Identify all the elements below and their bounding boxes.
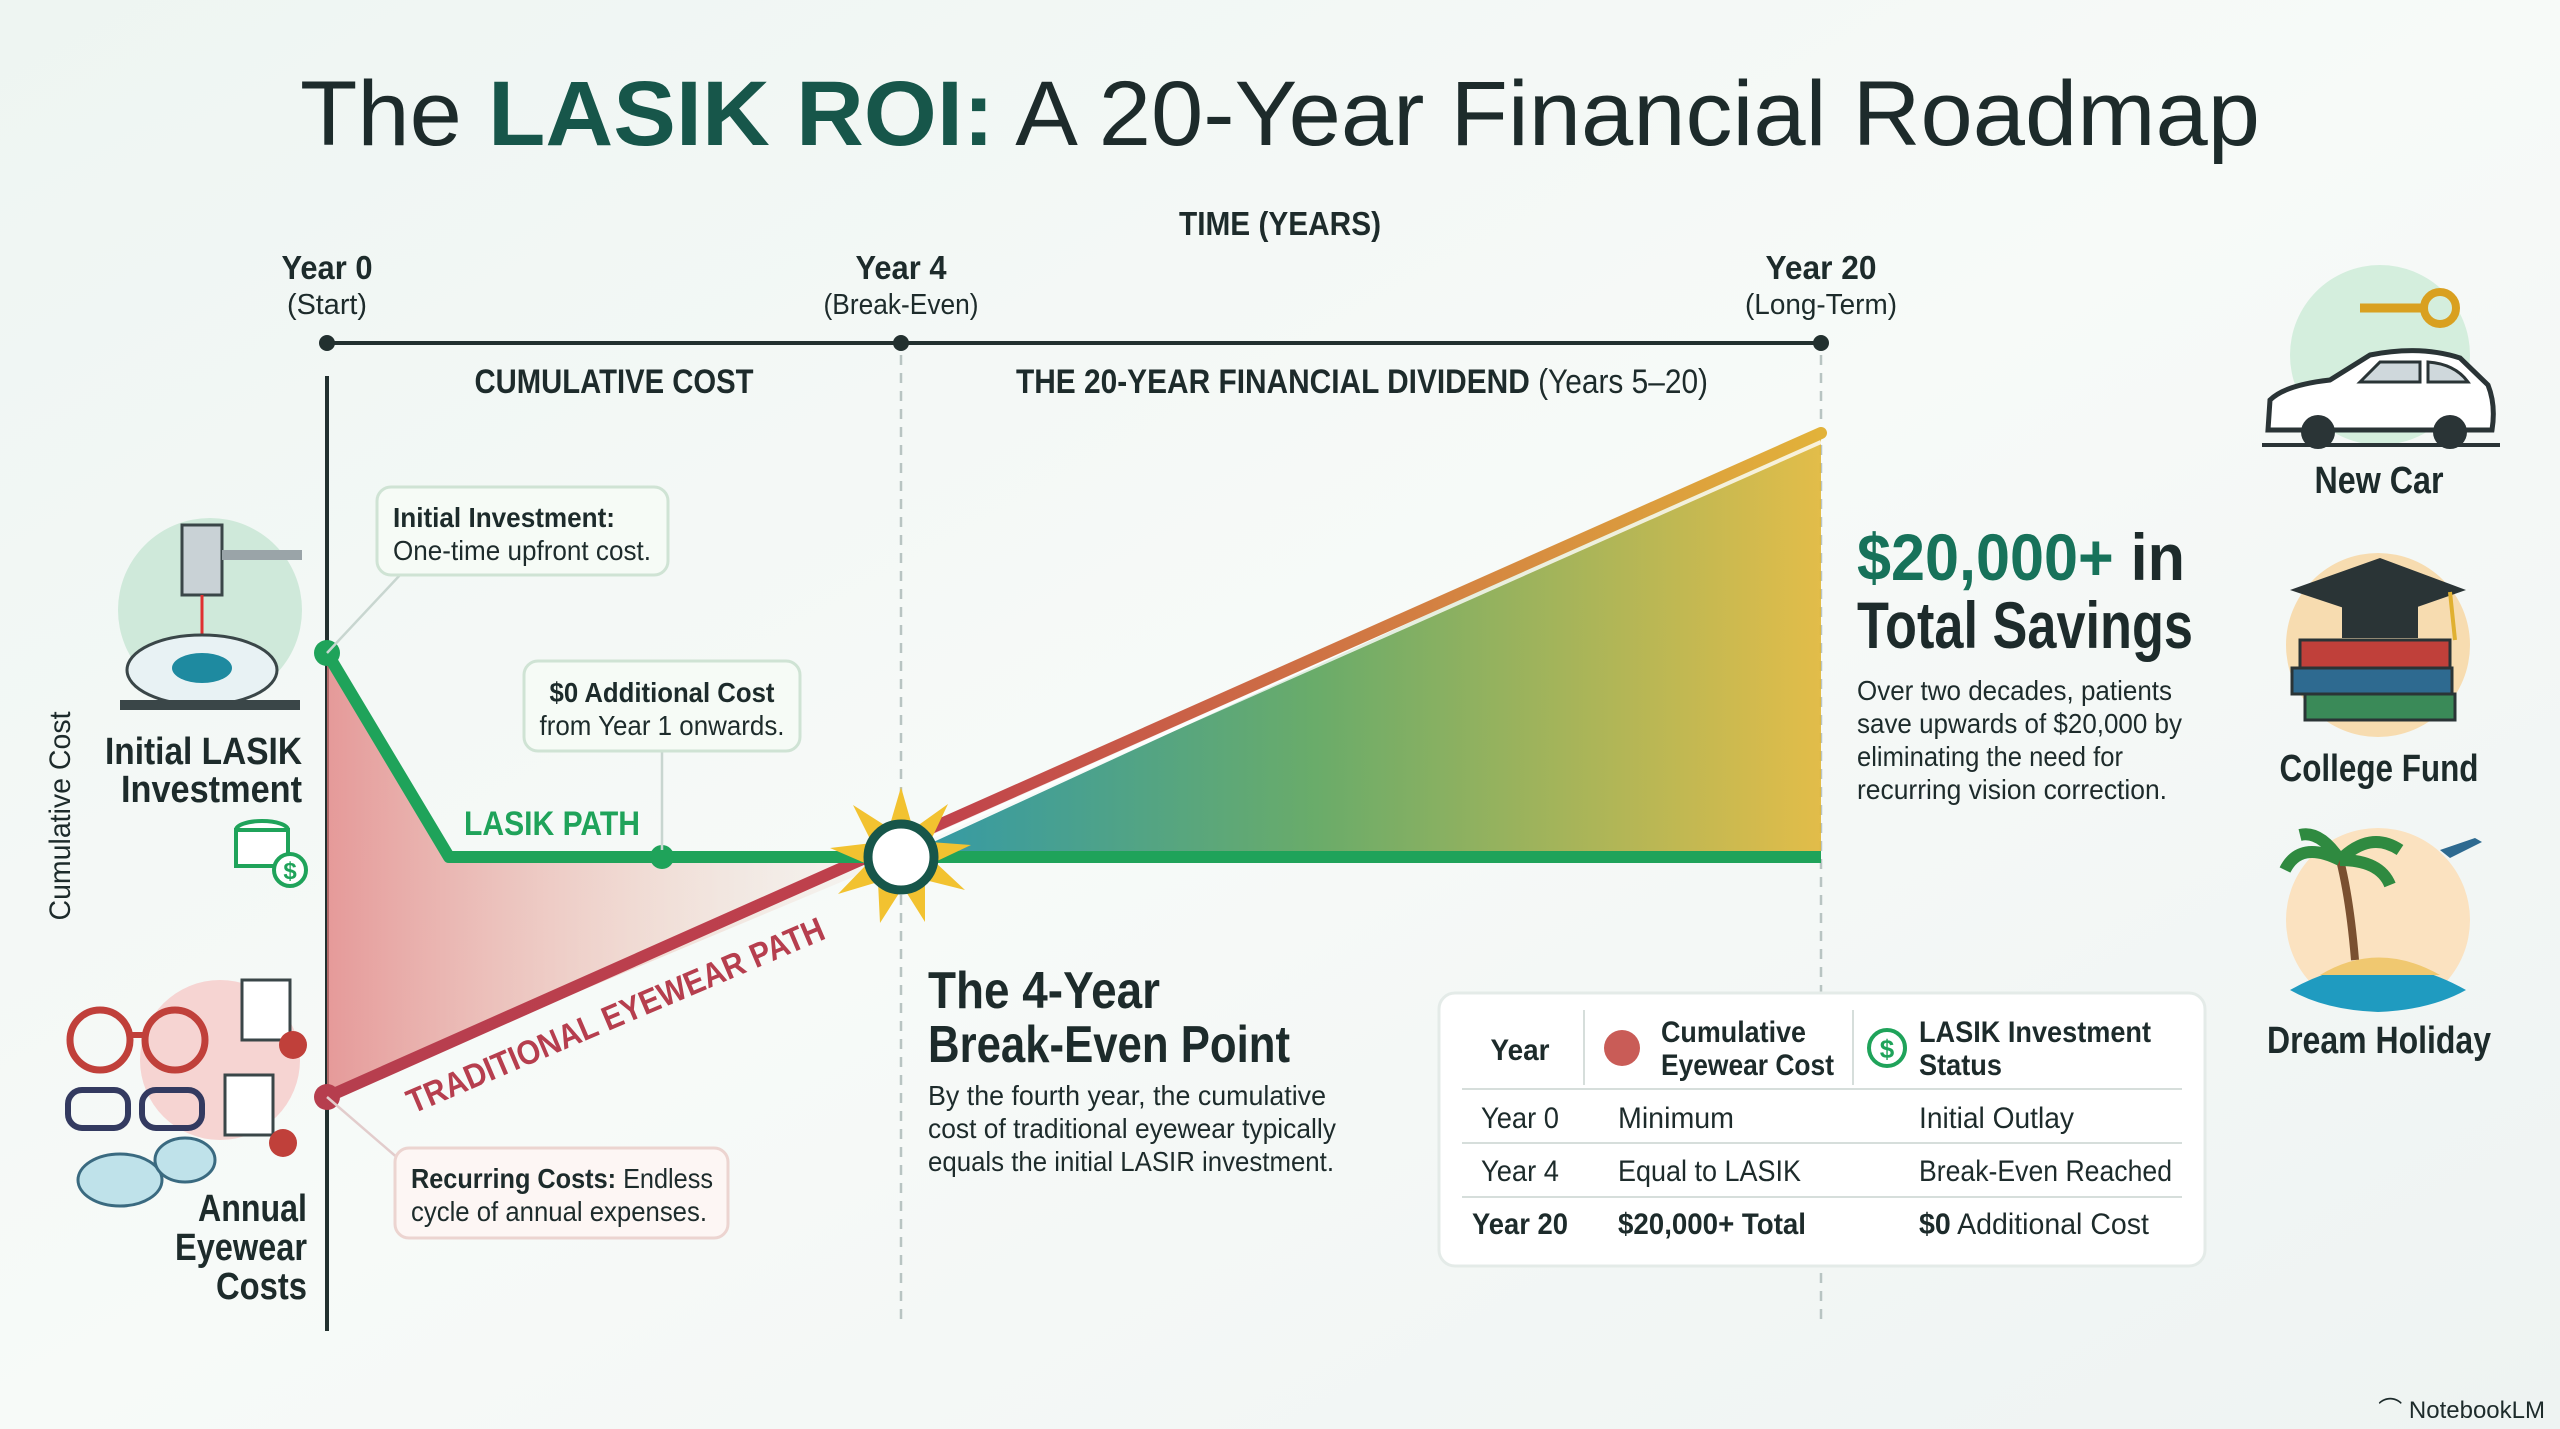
text: total savings: Total Savings (1857, 588, 2193, 662)
label: annual eyewear costs: Eyewear (175, 1227, 307, 1269)
label: annual eyewear costs (175, 1188, 307, 1308)
text: total savings (1857, 520, 2193, 805)
table: $0 Additional Cost (1919, 1208, 2150, 1241)
icon: coins (236, 821, 306, 886)
label: initial lasik investment: Investment (121, 769, 302, 811)
label: annual eyewear costs: Annual (198, 1188, 307, 1230)
lasik path line (314, 640, 1821, 1110)
table: Status (1919, 1049, 2002, 1082)
text: total savings: Over two decades, patients (1857, 675, 2172, 706)
year labels: (Long-Term) (1745, 289, 1897, 321)
icon: laser eye (118, 518, 302, 710)
text: break-even point (928, 962, 1336, 1177)
callout: initial investment (327, 487, 668, 653)
text: break-even point: equals the initial LASIR investment. (928, 1146, 1334, 1177)
year labels: (Break-Even) (824, 289, 978, 321)
table: Equal to LASIK (1618, 1155, 1801, 1188)
table: Year 0 (1481, 1102, 1559, 1135)
table: Initial Outlay (1919, 1102, 2074, 1135)
table: Break-Even Reached (1919, 1155, 2172, 1188)
axis label: time: TIME (YEARS) (1179, 205, 1381, 242)
text: total savings: recurring vision correction. (1857, 774, 2167, 805)
axis label: cumulative cost: Cumulative Cost (44, 711, 77, 920)
label: college fund: College Fund (2280, 748, 2478, 790)
year labels: Year 20 (1766, 249, 1876, 286)
icon: coins: $ (283, 858, 297, 885)
table: Year 20 (1472, 1208, 1568, 1241)
table: Eyewear Cost (1661, 1049, 1834, 1082)
text: total savings: $20,000+ in (1857, 520, 2185, 594)
red area: early cost zone (327, 653, 901, 1097)
text: break-even point: By the fourth year, the cumulative (928, 1080, 1326, 1111)
table: Year 4 (1481, 1155, 1559, 1188)
table: Minimum (1618, 1102, 1734, 1135)
label: initial lasik investment (105, 731, 302, 811)
label: lasik path: LASIK PATH (464, 805, 640, 843)
table (1439, 993, 2205, 1266)
year labels: Year 0 (282, 249, 372, 286)
icon: new car (2262, 265, 2500, 449)
callout: initial investment: One-time upfront cost. (393, 535, 651, 566)
callout: initial investment: Initial Investment: (393, 502, 615, 533)
label: annual eyewear costs: Costs (216, 1266, 307, 1308)
icon: dream holiday (2285, 828, 2482, 1012)
label: initial lasik investment: Initial LASIK (105, 731, 302, 773)
label: traditional eyewear path: TRADITIONAL EYEWEAR PATH (401, 910, 830, 1121)
time axis (319, 335, 1829, 351)
table: $ (1880, 1034, 1895, 1064)
table: Year (1490, 1034, 1550, 1067)
callout: recurring costs: Recurring Costs: Endless (411, 1163, 713, 1194)
table: $20,000+ Total (1618, 1208, 1806, 1241)
savings area (901, 433, 1821, 857)
text: break-even point: The 4-Year (928, 962, 1160, 1020)
text: total savings: save upwards of $20,000 by (1857, 708, 2182, 739)
table: Cumulative (1661, 1016, 1806, 1049)
year labels (282, 249, 1897, 321)
text: THE 20-YEAR FINANCIAL DIVIDEND (Years 5–20) (1016, 363, 1708, 401)
year labels: (Start) (287, 289, 367, 321)
icon: college fund (2286, 553, 2470, 737)
title: The LASIK ROI: A 20-Year Financial Roadmap (300, 63, 2260, 165)
icon: glasses and bills (68, 980, 307, 1206)
section headings: CUMULATIVE COST (474, 363, 754, 401)
text: break-even point: cost of traditional eyewear typically (928, 1113, 1336, 1144)
text: total savings: eliminating the need for (1857, 741, 2123, 772)
label: dream holiday: Dream Holiday (2267, 1020, 2491, 1062)
callout: $0 additional (524, 661, 800, 850)
callout: $0 additional: from Year 1 onwards. (540, 710, 784, 741)
break-even marker (830, 787, 971, 923)
text: break-even point: Break-Even Point (928, 1016, 1290, 1074)
table: LASIK Investment (1919, 1016, 2151, 1049)
watermark: ⌒ NotebookLM (2378, 1397, 2545, 1424)
label: new car: New Car (2314, 460, 2444, 502)
vertical axis (325, 376, 329, 1331)
callout: $0 additional: $0 Additional Cost (550, 677, 774, 708)
callout: recurring costs: cycle of annual expenses. (411, 1196, 707, 1227)
callout: recurring costs (327, 1097, 728, 1238)
year labels: Year 4 (856, 249, 947, 286)
traditional eyewear path line (327, 433, 1821, 1097)
